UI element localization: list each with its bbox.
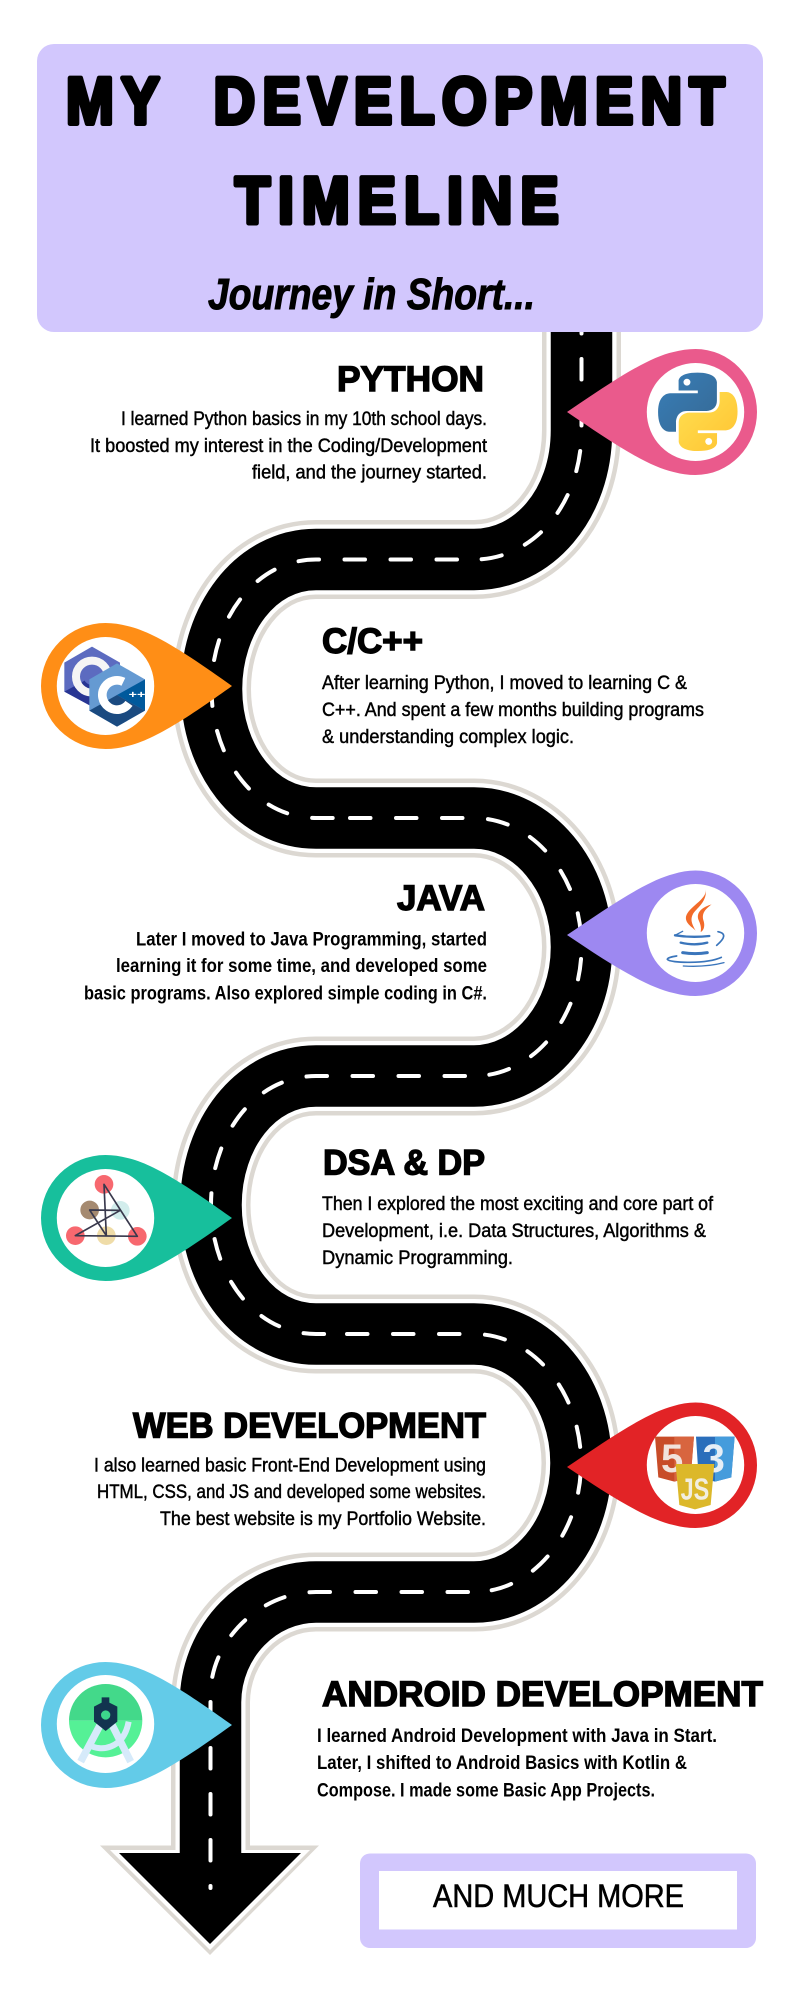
c++ plus signs: ++: [129, 690, 146, 701]
body: web development: I also learned basic Front-End Development using: [94, 1456, 486, 1476]
title line 1: MY DEVELOPMENT: [66, 65, 725, 138]
callout text: AND MUCH MORE: [433, 1878, 684, 1914]
body: android development: Later, I shifted to Android Basics with Kotlin &: [317, 1753, 687, 1774]
body: android development: [317, 1726, 717, 1802]
body: python: It boosted my interest in the Coding/Development: [90, 436, 488, 457]
icon: graph network: [66, 1175, 147, 1246]
callout: and much more: [360, 1854, 756, 1948]
heading: web development: WEB DEVELOPMENT: [133, 1406, 486, 1446]
section: c and c++: [322, 621, 704, 748]
subtitle: Journey in Short...: [208, 270, 535, 319]
heading: python: PYTHON: [337, 359, 484, 399]
body: dsa and dp: Then I explored the most exciting and core part of: [322, 1194, 714, 1215]
title line 2: TIMELINE: [235, 164, 559, 238]
section: python: [90, 359, 488, 484]
pin: data structures and algorithms: [41, 1155, 232, 1281]
body: c and c++: C++. And spent a few months building programs: [322, 700, 704, 721]
pin: web development: [567, 1402, 757, 1528]
icon: html css js shields: 5: [661, 1437, 683, 1481]
icon: html css js shields: JS: [681, 1472, 709, 1506]
body: java: basic programs. Also explored simple coding in C#.: [84, 984, 487, 1004]
section: web development: [94, 1406, 486, 1530]
heading: java: JAVA: [397, 878, 485, 918]
body: python: [90, 409, 488, 484]
section: android development: [317, 1674, 763, 1802]
icon: html css js shields: [655, 1437, 735, 1509]
body: c and c++: After learning Python, I moved to learning C &: [322, 673, 687, 694]
body: java: Later I moved to Java Programming, started: [136, 930, 487, 950]
body: java: learning it for some time, and developed some: [116, 956, 487, 977]
body: java: [84, 930, 487, 1004]
icon: html css js shields: 3: [703, 1437, 725, 1481]
body: android development: I learned Android Development with Java in Start.: [317, 1726, 717, 1747]
section: dsa and dp: [322, 1142, 714, 1269]
body: web development: The best website is my Portfolio Website.: [160, 1509, 486, 1530]
pin: java: [567, 870, 757, 996]
icon: python logo: [658, 373, 738, 451]
heading: android development: ANDROID DEVELOPMENT: [322, 1674, 763, 1714]
icon: java cup: [667, 889, 724, 966]
icon: android studio: [69, 1684, 142, 1762]
pin: android development: [41, 1662, 232, 1788]
body: web development: HTML, CSS, and JS and developed some websites.: [97, 1482, 486, 1503]
section: java: [84, 878, 487, 1004]
body: android development: Compose. I made some Basic App Projects.: [317, 1780, 655, 1802]
body: dsa and dp: Dynamic Programming.: [322, 1248, 513, 1269]
body: web development: [94, 1456, 486, 1530]
pin: python: [567, 349, 757, 475]
body: dsa and dp: [322, 1194, 714, 1269]
body: python: I learned Python basics in my 10th school days.: [121, 409, 487, 430]
header panel: [37, 44, 763, 332]
heading: dsa and dp: DSA & DP: [323, 1142, 485, 1182]
body: c and c++: & understanding complex logic.: [322, 727, 574, 748]
icon: c and c++ hexagons: [64, 647, 146, 727]
body: dsa and dp: Development, i.e. Data Structures, Algorithms &: [322, 1221, 706, 1242]
body: python: field, and the journey started.: [252, 462, 487, 484]
body: c and c++: [322, 673, 704, 748]
pin: c and c++: [41, 623, 232, 749]
winding road with arrow head: [100, 313, 582, 1955]
heading: c and c++: C/C++: [322, 621, 423, 661]
